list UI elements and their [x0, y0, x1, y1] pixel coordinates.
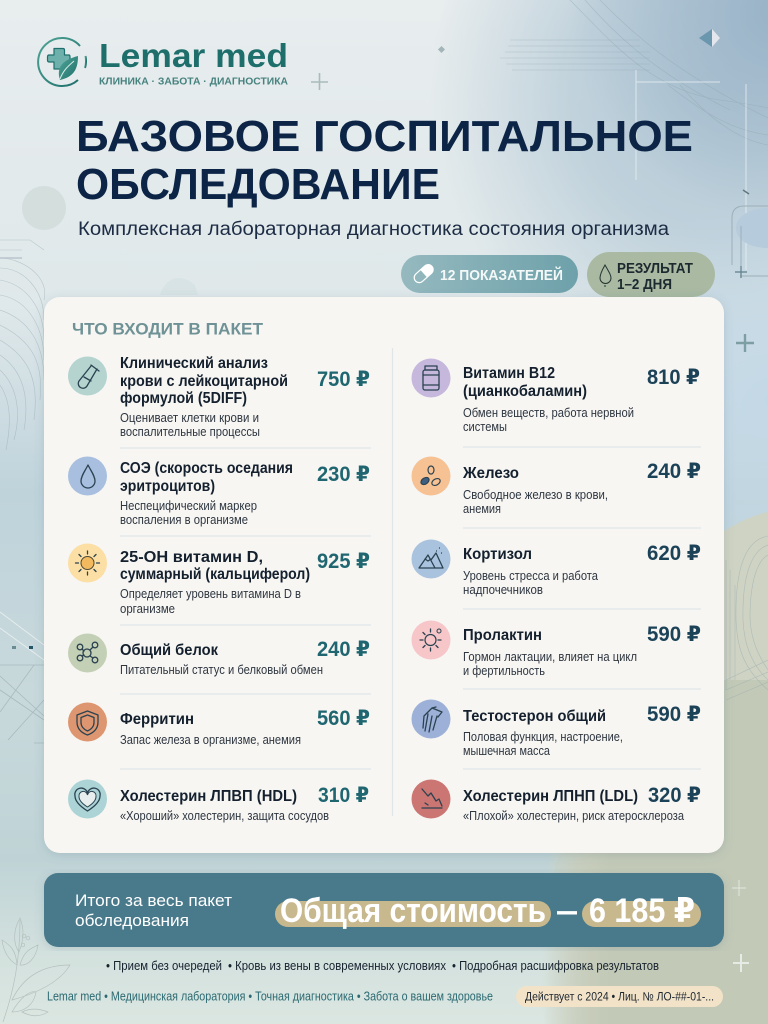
item: vitamin B12: Витамин B12 [463, 365, 555, 382]
item: total protein: Питательный статус и белковый обмен [120, 663, 323, 677]
benefits line [106, 958, 659, 973]
benefits line: • Прием без очередей [106, 958, 222, 973]
item: ESR: СОЭ (скорость оседания [120, 460, 293, 477]
benefits line: • Подробная расшифровка результатов [452, 958, 659, 973]
item: vitamin B12: Обмен веществ, работа нервной [463, 406, 634, 420]
item: LDL cholesterol: «Плохой» холестерин, риск атеросклероза [463, 809, 684, 823]
icon: sun [68, 544, 107, 582]
item: blood test: Клинический анализ [120, 355, 268, 372]
item: cortisol: Уровень стресса и работа [463, 569, 598, 583]
item: iron: Железо [462, 465, 519, 482]
icon: test tube [68, 356, 107, 396]
item: blood test: Оценивает клетки крови и [120, 411, 259, 425]
footer text: Lemar med • Медицинская лаборатория • Точная диагностика • Забота о вашем здоровье [47, 990, 493, 1004]
decorative leaves bottom left [2, 918, 70, 1022]
item: vitamin B12: 810 ₽ [647, 366, 700, 389]
icon: droplet [600, 265, 611, 287]
item: vitamin D: 925 ₽ [317, 550, 370, 573]
title: ОБСЛЕДОВАНИЕ [76, 161, 440, 209]
item: prolactin: и фертильность [463, 664, 545, 678]
item: prolactin: Пролактин [463, 627, 542, 644]
item: vitamin B12: системы [463, 420, 507, 434]
item: blood test [68, 355, 370, 439]
item: ESR: воспаления в организме [120, 513, 248, 527]
logo tagline: КЛИНИКА · ЗАБОТА · ДИАГНОСТИКА [99, 76, 288, 88]
badge: result time [587, 252, 715, 297]
item: LDL cholesterol: Холестерин ЛПНП (LDL) [463, 788, 638, 805]
item: iron: 240 ₽ [647, 460, 701, 483]
item: cortisol: надпочечников [463, 583, 543, 597]
license badge: Действует с 2024 • Лиц. № ЛО-##-01-... [525, 990, 714, 1004]
icon: water drop [68, 456, 107, 496]
item: ferritin: 560 ₽ [317, 707, 370, 730]
total price: 6 185 ₽ [589, 892, 695, 930]
item: ferritin [68, 702, 370, 747]
title [76, 113, 693, 209]
item: ferritin: Запас железа в организме, анемия [120, 733, 301, 747]
icon: molecule [68, 634, 107, 672]
item: prolactin: 590 ₽ [647, 623, 701, 646]
total price: Общая стоимость [280, 892, 546, 930]
benefits line: • Кровь из вены в современных условиях [228, 958, 446, 973]
item: ESR: эритроцитов) [120, 478, 215, 495]
panel: package contents [44, 297, 724, 853]
icon: heart [68, 780, 107, 818]
item: HDL cholesterol: Холестерин ЛПВП (HDL) [120, 788, 297, 805]
item: vitamin D: Определяет уровень витамина D в [120, 587, 301, 601]
item: vitamin D [68, 544, 370, 616]
item: vitamin D: суммарный (кальциферол) [120, 566, 310, 583]
item: HDL cholesterol: «Хороший» холестерин, защита сосудов [120, 809, 329, 823]
item: blood test: крови с лейкоцитарной [120, 373, 288, 390]
item: iron [412, 456, 701, 516]
license badge [516, 986, 723, 1007]
item: LDL cholesterol: 320 ₽ [648, 784, 701, 807]
item: iron: Свободное железо в крови, [463, 488, 608, 502]
icon: mountains [412, 540, 450, 578]
item: HDL cholesterol [68, 780, 369, 823]
item: HDL cholesterol: 310 ₽ [318, 784, 369, 807]
icon: shield [68, 702, 107, 742]
item: LDL cholesterol [412, 780, 701, 823]
icon: sun with flower [412, 620, 450, 660]
icon: hand [412, 700, 450, 738]
title: БАЗОВОЕ ГОСПИТАЛЬНОЕ [76, 113, 693, 161]
logo [38, 37, 288, 88]
item: prolactin: Гормон лактации, влияет на цикл [463, 650, 637, 664]
item: cortisol: Кортизол [463, 546, 532, 563]
subtitle: Комплексная лабораторная диагностика состояния организма [78, 219, 669, 240]
logo icon [38, 38, 86, 86]
item: testosterone: 590 ₽ [647, 703, 701, 726]
icon: capsule [412, 263, 435, 285]
item: total protein: Общий белок [120, 642, 219, 659]
icon: falling chart [412, 780, 450, 818]
item: iron: анемия [463, 502, 501, 516]
item: ESR: Неспецифический маркер [120, 499, 257, 513]
badge: 12 indicators: 12 ПОКАЗАТЕЛЕЙ [440, 266, 563, 284]
item: cortisol [412, 540, 701, 597]
item: cortisol: 620 ₽ [647, 542, 701, 565]
item: ESR: 230 ₽ [317, 463, 370, 486]
logo name: Lemar med [99, 37, 288, 74]
badge: 12 indicators [401, 255, 578, 293]
icon: iron granules [412, 456, 450, 496]
total price: — [557, 892, 577, 930]
item: blood test: 750 ₽ [317, 368, 370, 391]
icon: bottle [412, 358, 450, 398]
item: testosterone: Половая функция, настроение, [463, 730, 623, 744]
badge: result time: РЕЗУЛЬТАТ [617, 261, 693, 277]
total label: обследования [75, 911, 189, 930]
item: blood test: формулой (5DIFF) [120, 390, 247, 407]
item: prolactin [412, 620, 701, 678]
item: vitamin B12 [412, 358, 700, 434]
item: vitamin D: 25-ОН витамин D, [120, 549, 263, 566]
item: blood test: воспалительные процессы [120, 425, 260, 439]
badge: result time: 1–2 ДНЯ [617, 277, 672, 293]
item: testosterone: мышечная масса [463, 744, 550, 758]
item: vitamin D: организме [120, 602, 175, 616]
total label: Итого за весь пакет [75, 891, 232, 910]
total label [75, 891, 232, 930]
item: vitamin B12: (цианкобаламин) [463, 383, 587, 400]
decorative shapes left [0, 186, 198, 743]
decorative arcs right [726, 536, 768, 972]
item: total protein: 240 ₽ [317, 638, 370, 661]
panel heading: ЧТО ВХОДИТ В ПАКЕТ [72, 320, 264, 338]
item: testosterone [412, 700, 701, 758]
item: testosterone: Тестостерон общий [463, 708, 606, 725]
item: ESR [68, 456, 370, 527]
item: ferritin: Ферритин [120, 711, 194, 728]
item: total protein [68, 634, 370, 677]
total price bar [44, 873, 724, 947]
decorative lines top right [311, 0, 768, 352]
